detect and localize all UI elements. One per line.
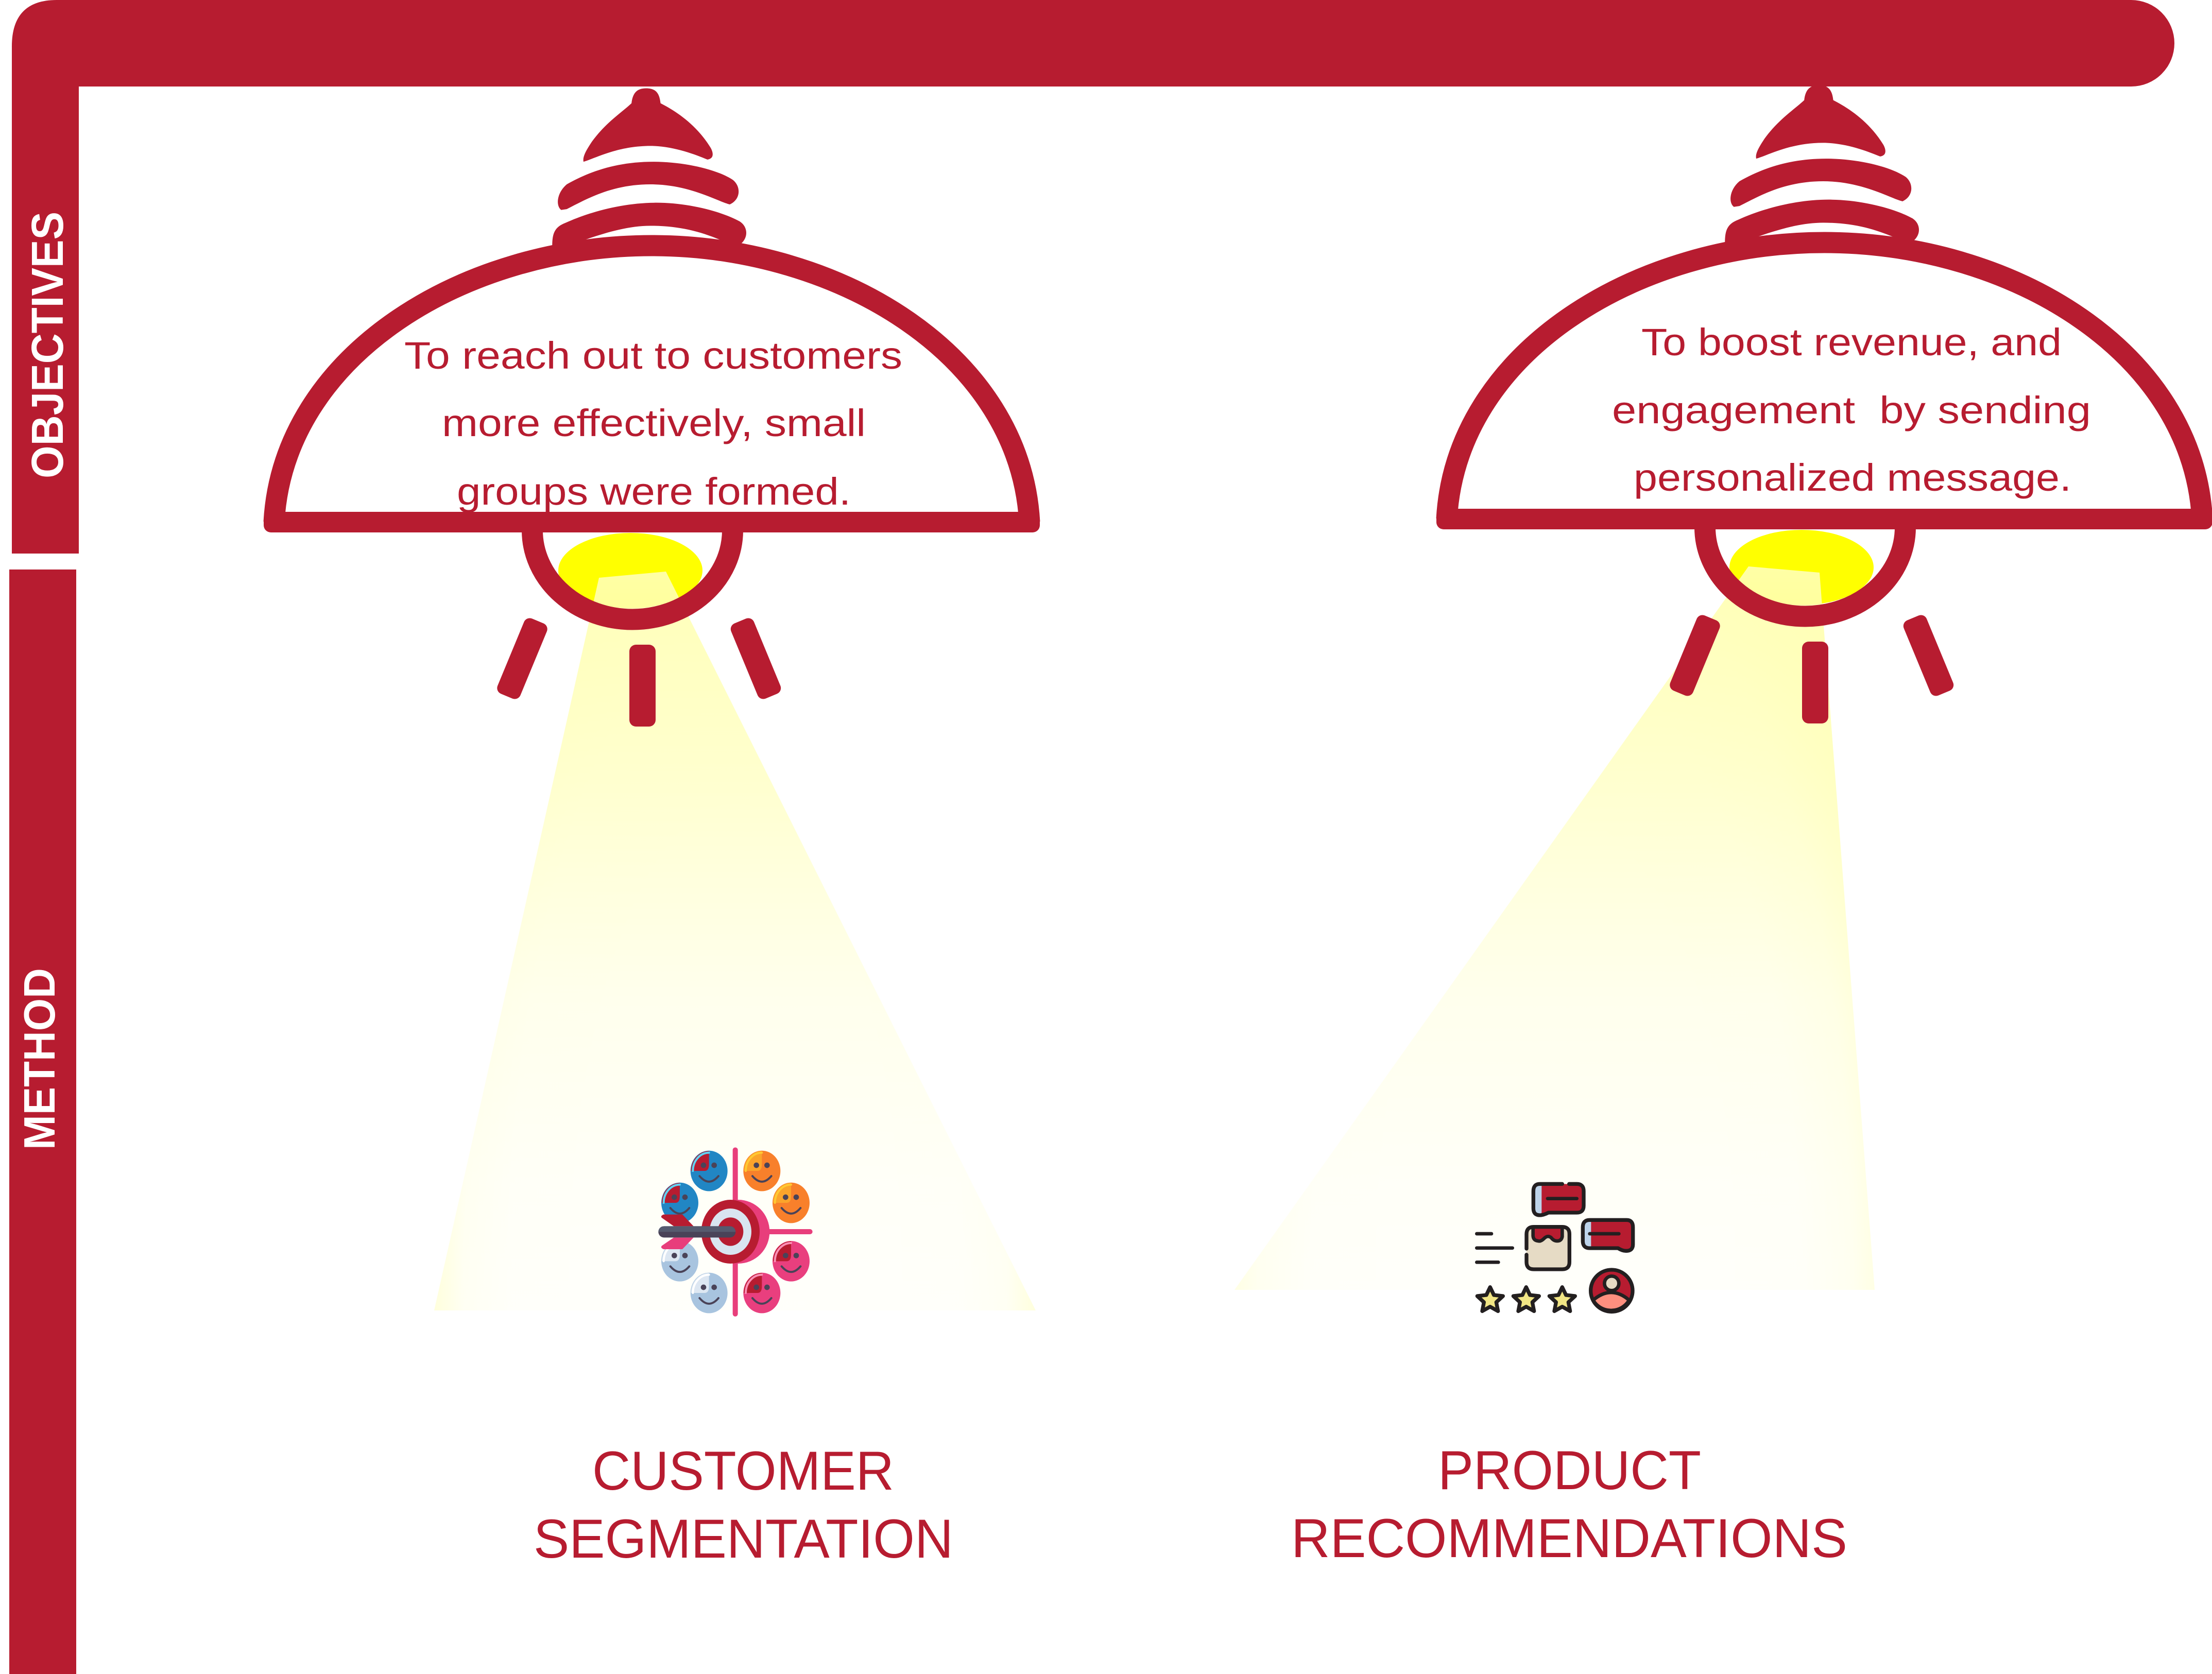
speech bubble top <box>1533 1184 1584 1215</box>
objective text: more effectively, small <box>442 402 866 444</box>
method label: customer segmentation: SEGMENTATION <box>534 1508 953 1569</box>
arrow <box>658 1215 735 1249</box>
method label: product recommendations: RECOMMENDATIONS <box>1291 1507 1847 1569</box>
objective text: personalized message. <box>1634 456 2071 499</box>
lamp: product recommendations <box>1234 85 2212 1290</box>
user avatar <box>1591 1270 1633 1311</box>
objective text: To boost revenue, and <box>1641 321 2062 364</box>
crosshair <box>735 1150 810 1314</box>
package box <box>1527 1227 1569 1269</box>
method label: METHOD <box>15 968 64 1150</box>
method label: product recommendations: PRODUCT <box>1438 1439 1701 1501</box>
method label: customer segmentation <box>534 1440 953 1569</box>
method label: customer segmentation: CUSTOMER <box>592 1440 894 1502</box>
objectives label: OBJECTIVES <box>23 212 73 478</box>
rating stars <box>1477 1287 1575 1311</box>
icon: product recommendations <box>1477 1184 1633 1311</box>
lamp fixture <box>264 88 1040 727</box>
objective text <box>1612 321 2091 499</box>
speech bubble right <box>1583 1220 1633 1251</box>
method label: product recommendations <box>1291 1439 1847 1569</box>
icon: customer segmentation target <box>658 1150 810 1314</box>
objective text: To reach out to customers <box>404 334 902 377</box>
lamp fixture <box>1436 85 2212 723</box>
lamp: customer segmentation <box>264 88 1040 1310</box>
method bar <box>9 569 76 1674</box>
objective text: groups were formed. <box>457 470 851 513</box>
target rings <box>701 1200 769 1264</box>
light beam <box>1234 566 1875 1290</box>
bulb glow <box>1729 530 1874 605</box>
light beam <box>434 572 1036 1310</box>
bulb glow <box>558 533 702 608</box>
speed lines <box>1477 1234 1513 1262</box>
objective text: engagement by sending <box>1612 389 2091 432</box>
objective text <box>404 334 902 513</box>
smiling faces <box>661 1151 810 1313</box>
